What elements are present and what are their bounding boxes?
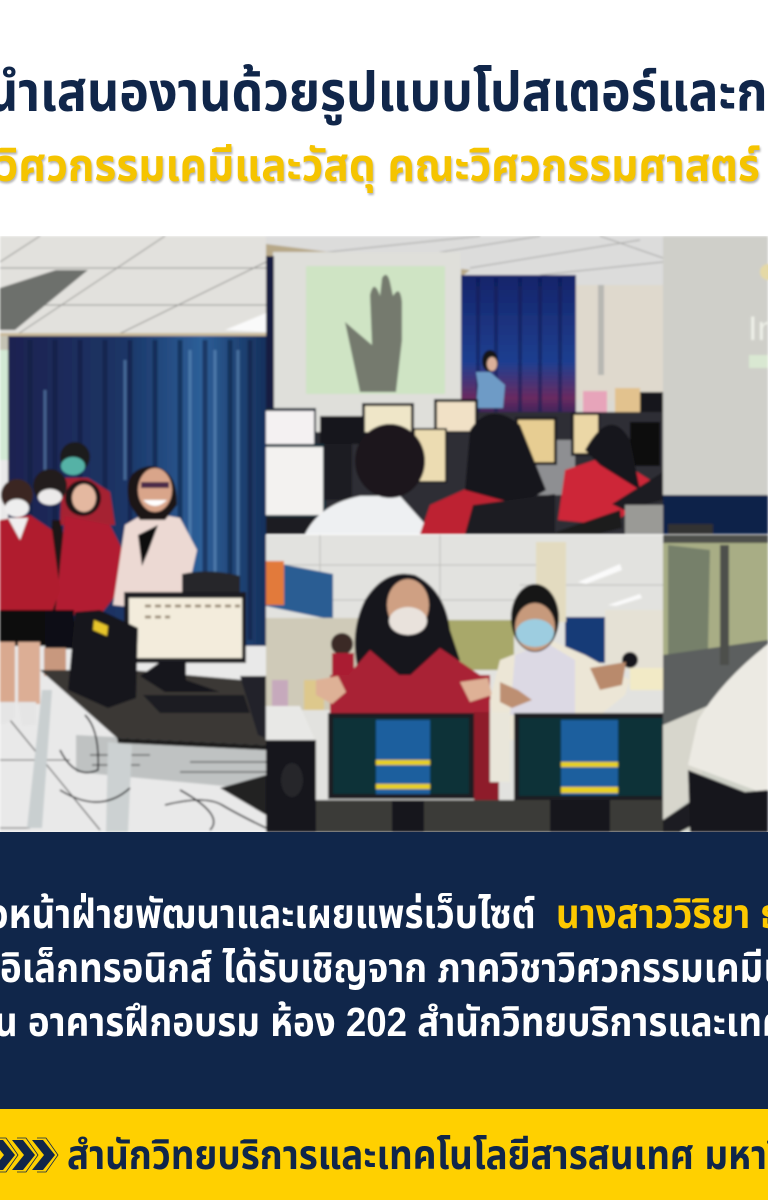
lower red jacket: [474, 712, 499, 800]
tablet: [240, 676, 266, 738]
desk legs: [27, 690, 52, 828]
projection: [306, 266, 445, 394]
photo: student bending: [663, 535, 768, 832]
floor lines: [0, 720, 100, 830]
student right: [490, 640, 630, 740]
student in mask (back): [60, 442, 90, 472]
skirts and legs: [0, 610, 74, 646]
pc tower: [68, 610, 138, 708]
yellow footer: [0, 1109, 768, 1200]
hand: [345, 275, 402, 392]
photo: lecture room: [266, 236, 663, 534]
back wall: [266, 618, 444, 710]
students: [33, 469, 67, 503]
desk band: [316, 432, 663, 534]
photo: group with teacher: [0, 236, 266, 832]
navy text panel: [0, 832, 768, 1109]
icon: chevrons: [0, 1138, 58, 1172]
pc tower: [266, 740, 316, 832]
photo collage: [0, 236, 768, 832]
teacher: [113, 512, 197, 610]
student left: [355, 574, 460, 700]
cables: [60, 715, 266, 830]
photo: presentation screen: [663, 236, 768, 534]
chair: [182, 571, 240, 594]
keyboard: [143, 695, 250, 713]
desk top: [40, 670, 266, 745]
tv on wall: [266, 561, 333, 620]
photo: two students at monitors: [266, 535, 663, 832]
back monitors: [583, 391, 607, 413]
desk under-shelf: [76, 735, 266, 790]
monitor: [124, 592, 246, 663]
desk: [266, 800, 663, 832]
seated students: [305, 496, 434, 534]
lecturer: [476, 372, 505, 408]
monitors: [328, 713, 474, 799]
background people: [331, 633, 353, 655]
curtain: [461, 275, 576, 420]
